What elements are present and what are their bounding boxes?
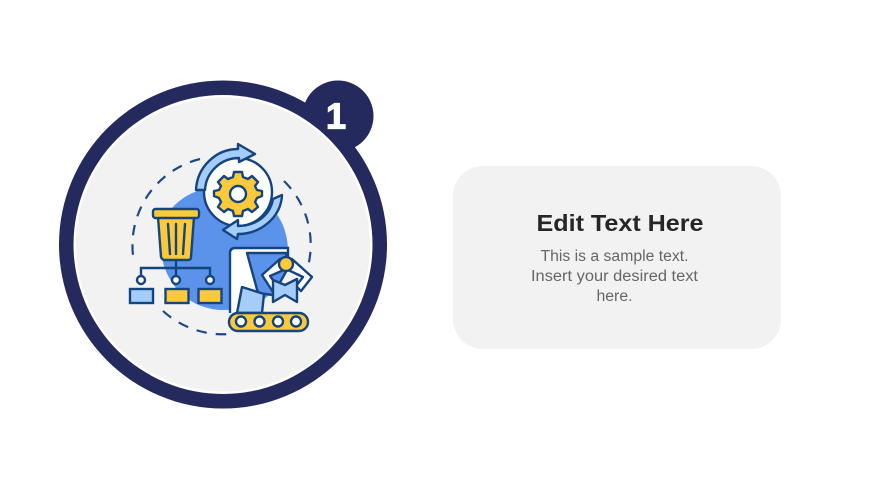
conveyor rollers: [236, 316, 301, 326]
outer navy ring: [59, 80, 387, 408]
inner grey disc: [76, 98, 370, 392]
panel: numbered circle: [59, 80, 387, 408]
connector nodes: [137, 276, 214, 284]
number badge: 1: [326, 96, 346, 136]
card body text: [531, 248, 699, 305]
icon: cycle gear: [196, 144, 282, 239]
panel: text card: [453, 166, 781, 349]
card body text: Insert your desired text: [531, 268, 699, 285]
light blue box: [130, 289, 153, 303]
icon: robotic conveyor: [229, 248, 312, 331]
gripped item: [273, 279, 297, 302]
machine panel: [230, 248, 288, 313]
number badge: [302, 80, 374, 152]
icon: gear: [214, 172, 262, 216]
card body text: here.: [596, 288, 632, 305]
light blue block: [237, 287, 264, 313]
card body text: This is a sample text.: [540, 248, 688, 265]
yellow box: [198, 289, 222, 303]
blue blob: [160, 187, 288, 310]
machine frame: [230, 248, 288, 313]
dashed orbit: [132, 159, 311, 334]
claw arms: [262, 259, 312, 292]
card background: [453, 166, 781, 349]
icon: top cycle arrow: [196, 144, 255, 190]
trash bin body: [158, 217, 194, 260]
claw hub: [279, 257, 293, 271]
icon: bottom cycle arrow: [223, 195, 282, 239]
white gear disc: [204, 158, 272, 226]
card heading: Edit Text Here: [536, 210, 704, 236]
icon: funnel hierarchy: [130, 209, 222, 303]
trash bin ribs: [168, 224, 185, 254]
yellow box: [166, 289, 188, 303]
inner white edge: [74, 95, 372, 394]
connector lines: [141, 260, 210, 276]
trash bin lid: [153, 209, 199, 218]
conveyor belt: [229, 313, 308, 331]
machine blue face: [247, 253, 288, 295]
